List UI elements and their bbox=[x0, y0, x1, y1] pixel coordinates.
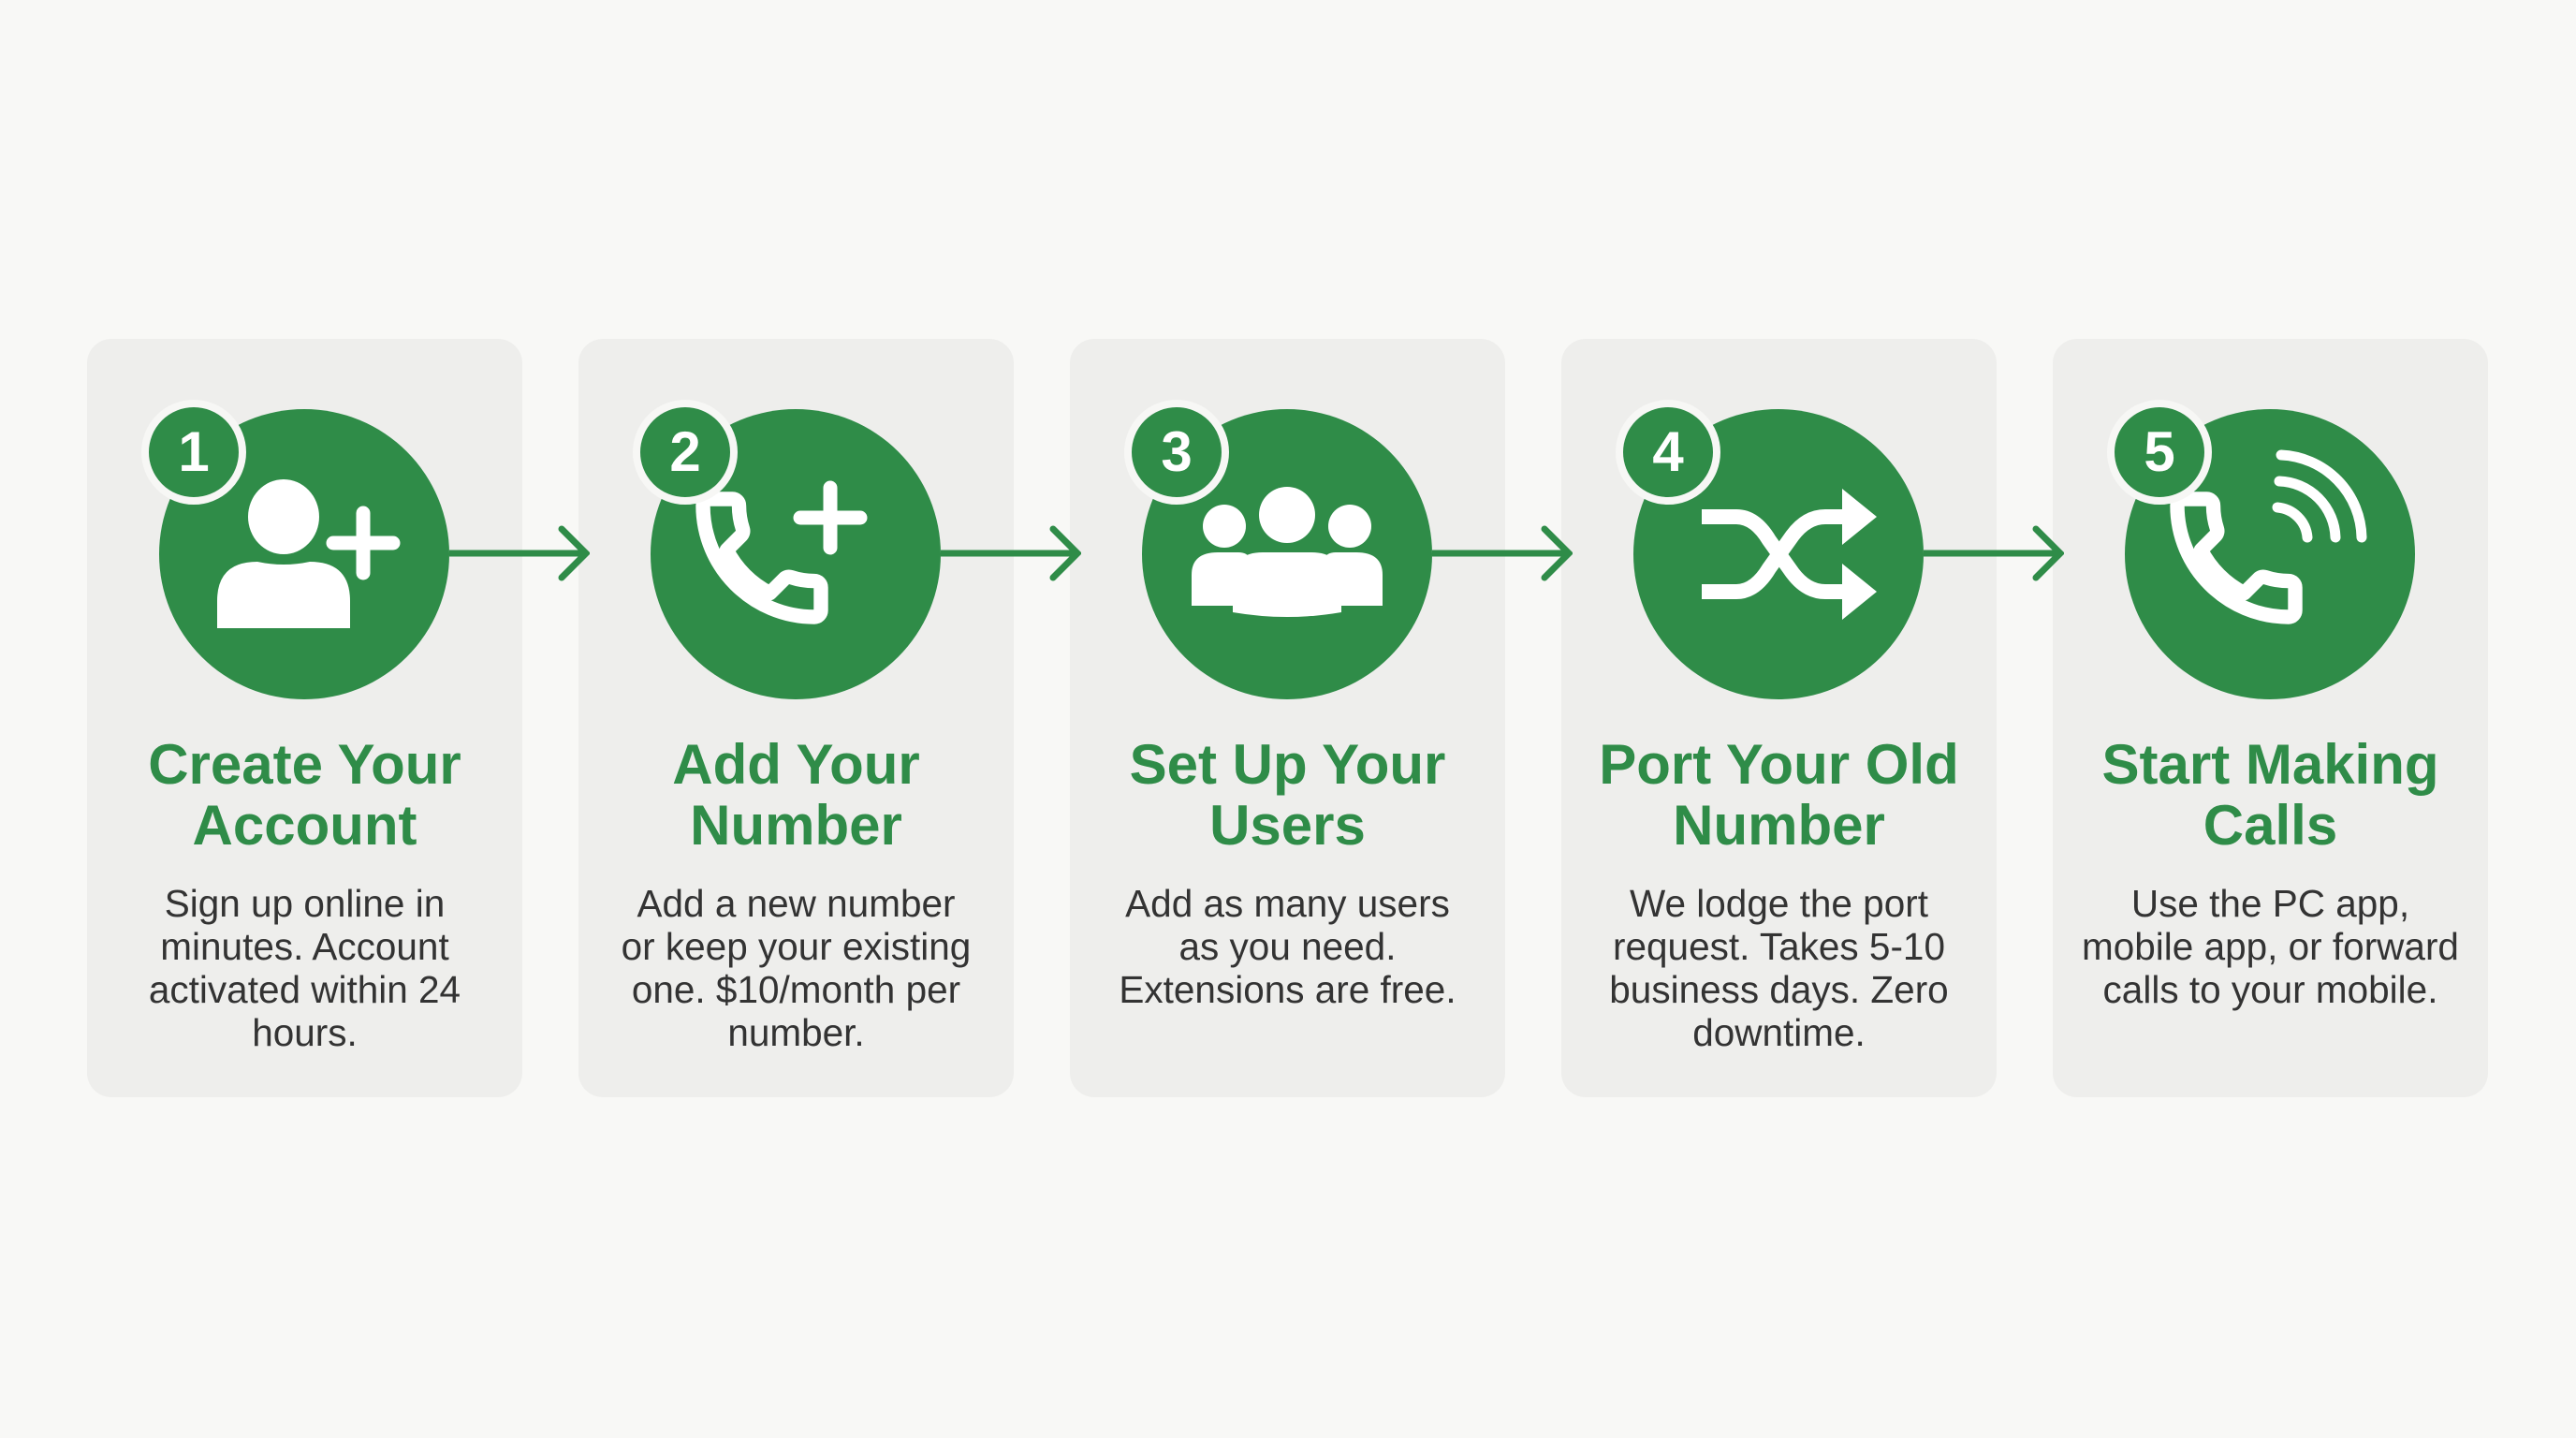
text 5: mobile app, or forward bbox=[2082, 925, 2459, 968]
text 3: Extensions are free. bbox=[1119, 968, 1456, 1011]
badge 5: 5 bbox=[2144, 420, 2175, 483]
title 2: Add Your bbox=[672, 733, 920, 796]
title 3 bbox=[1130, 733, 1445, 857]
badge 5 bbox=[2107, 400, 2212, 505]
text 4 bbox=[1609, 882, 1949, 1054]
title 3: Users bbox=[1209, 794, 1366, 857]
icon: phone plus bbox=[651, 409, 941, 699]
text 3: Add as many users bbox=[1125, 882, 1450, 925]
badge 2 bbox=[633, 400, 738, 505]
title 2: Number bbox=[690, 794, 902, 857]
card 3 bbox=[1070, 339, 1505, 1097]
badge 1: 1 bbox=[178, 420, 210, 483]
text 1: minutes. Account bbox=[160, 925, 449, 968]
text 2: number. bbox=[727, 1011, 865, 1054]
badge 3: 3 bbox=[1161, 420, 1193, 483]
badge 3 bbox=[1124, 400, 1229, 505]
text 3 bbox=[1119, 882, 1456, 1011]
text 1 bbox=[149, 882, 461, 1054]
arrow 1 bbox=[449, 526, 590, 580]
badge 4: 4 bbox=[1652, 420, 1684, 483]
text 1: hours. bbox=[252, 1011, 358, 1054]
title 4 bbox=[1599, 733, 1959, 857]
icon: phone waves bbox=[2125, 409, 2415, 699]
icon: shuffle bbox=[1633, 409, 1924, 699]
text 2: Add a new number bbox=[637, 882, 955, 925]
text 4: downtime. bbox=[1692, 1011, 1866, 1054]
text 2: one. $10/month per bbox=[632, 968, 960, 1011]
text 2 bbox=[622, 882, 971, 1054]
badge 1 bbox=[141, 400, 246, 505]
text 4: business days. Zero bbox=[1609, 968, 1949, 1011]
title 4: Port Your Old bbox=[1599, 733, 1959, 796]
text 1: Sign up online in bbox=[165, 882, 445, 925]
arrow 3 bbox=[1432, 526, 1573, 580]
title 5: Start Making bbox=[2101, 733, 2439, 796]
card 2 bbox=[578, 339, 1014, 1097]
text 1: activated within 24 bbox=[149, 968, 461, 1011]
title 1 bbox=[148, 733, 461, 857]
text 5: calls to your mobile. bbox=[2103, 968, 2437, 1011]
arrow 2 bbox=[941, 526, 1081, 580]
icon: users bbox=[1142, 409, 1432, 699]
icon: person add bbox=[159, 409, 449, 699]
title 5: Calls bbox=[2203, 794, 2337, 857]
title 5 bbox=[2101, 733, 2439, 857]
title 3: Set Up Your bbox=[1130, 733, 1445, 796]
title 2 bbox=[672, 733, 920, 857]
text 4: request. Takes 5-10 bbox=[1613, 925, 1945, 968]
text 3: as you need. bbox=[1179, 925, 1396, 968]
badge 4 bbox=[1616, 400, 1720, 505]
badge 2: 2 bbox=[669, 420, 701, 483]
card 4 bbox=[1561, 339, 1997, 1097]
text 4: We lodge the port bbox=[1630, 882, 1928, 925]
card 5 bbox=[2053, 339, 2488, 1097]
text 2: or keep your existing bbox=[622, 925, 971, 968]
title 4: Number bbox=[1673, 794, 1885, 857]
text 5 bbox=[2082, 882, 2459, 1011]
card 1 bbox=[87, 339, 522, 1097]
arrow 4 bbox=[1924, 526, 2064, 580]
title 1: Account bbox=[193, 794, 417, 857]
text 5: Use the PC app, bbox=[2131, 882, 2409, 925]
title 1: Create Your bbox=[148, 733, 461, 796]
